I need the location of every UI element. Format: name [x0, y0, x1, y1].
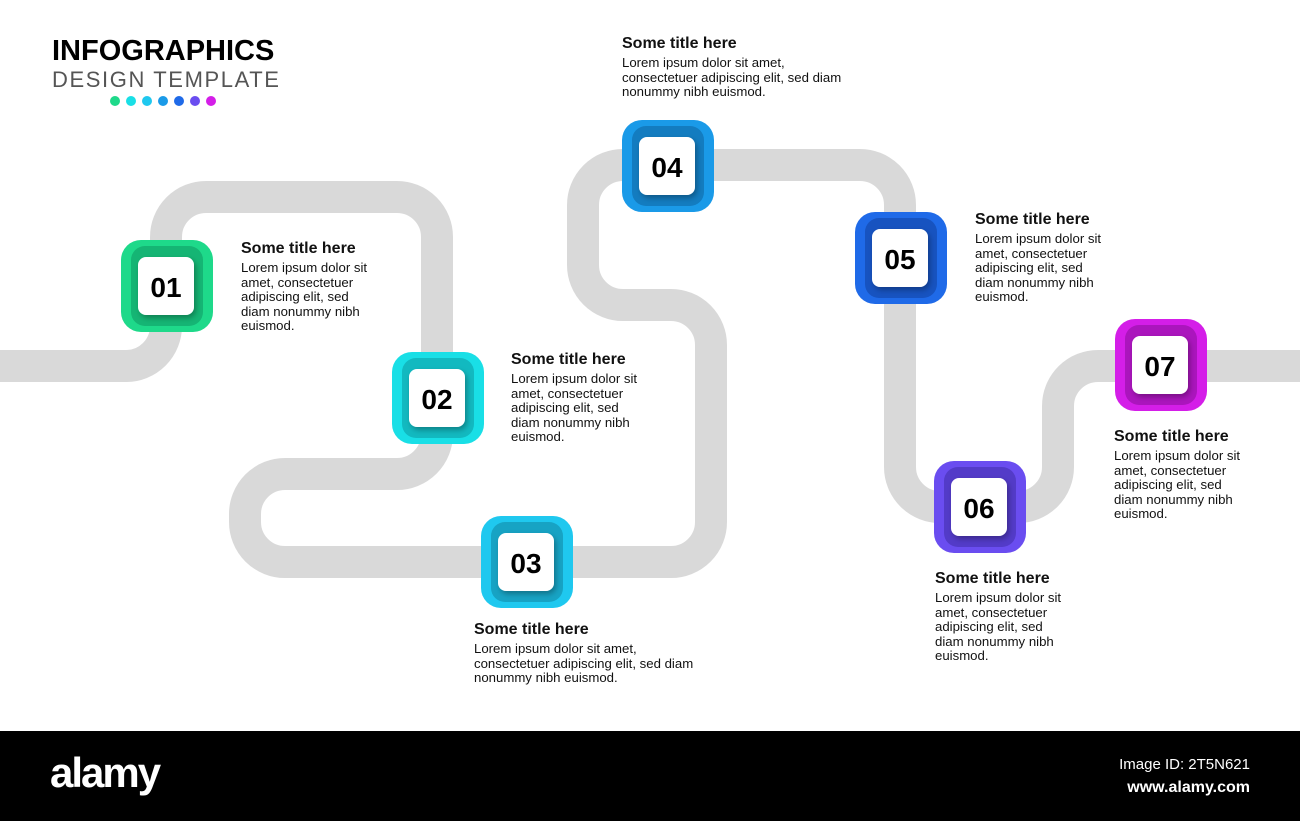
title: INFOGRAPHICS: [52, 35, 274, 67]
text 05: adipiscing elit, sed: [975, 260, 1083, 275]
title: DESIGN TEMPLATE: [52, 67, 281, 92]
text 07: diam nonummy nibh: [1114, 492, 1233, 507]
text 04: Some title here: [622, 35, 737, 52]
text 02: diam nonummy nibh: [511, 415, 630, 430]
text 07: adipiscing elit, sed: [1114, 477, 1222, 492]
text 01: diam nonummy nibh: [241, 304, 360, 319]
marker 06: 06: [963, 493, 995, 524]
marker 01: 01: [150, 272, 182, 303]
text 05: diam nonummy nibh: [975, 275, 1094, 290]
marker 04: 04: [651, 152, 683, 183]
text 04: Lorem ipsum dolor sit amet,: [622, 55, 785, 70]
text 06: Some title here: [935, 570, 1050, 587]
marker 03: [481, 516, 573, 608]
text 02: Lorem ipsum dolor sit: [511, 371, 637, 386]
text 05: amet, consectetuer: [975, 246, 1087, 261]
marker 05: 05: [884, 244, 916, 275]
text 03: nonummy nibh euismod.: [474, 670, 618, 685]
text 01: adipiscing elit, sed: [241, 289, 349, 304]
text 02: Some title here: [511, 351, 626, 368]
text 06: diam nonummy nibh: [935, 634, 1054, 649]
text 06: amet, consectetuer: [935, 605, 1047, 620]
text 07: amet, consectetuer: [1114, 463, 1226, 478]
text 05: euismod.: [975, 289, 1029, 304]
text 01: euismod.: [241, 318, 295, 333]
text 01: [241, 240, 367, 333]
text 03: Some title here: [474, 621, 589, 638]
marker 02: 02: [421, 384, 453, 415]
text 07: [1114, 428, 1240, 521]
text 06: [935, 570, 1061, 663]
image id: [1119, 756, 1250, 796]
marker 02: [392, 352, 484, 444]
marker 01: [121, 240, 213, 332]
logo: alamy: [50, 749, 159, 796]
text 03: [474, 621, 693, 685]
text 05: Some title here: [975, 211, 1090, 228]
text 02: [511, 351, 637, 444]
text 05: Lorem ipsum dolor sit: [975, 231, 1101, 246]
text 02: adipiscing elit, sed: [511, 400, 619, 415]
dots: [110, 96, 216, 106]
image id: Image ID: 2T5N621: [1119, 756, 1250, 773]
title: [52, 35, 281, 106]
text 06: euismod.: [935, 648, 989, 663]
marker 03: 03: [510, 548, 542, 579]
text 05: [975, 211, 1101, 304]
text 04: nonummy nibh euismod.: [622, 84, 766, 99]
text 03: consectetuer adipiscing elit, sed diam: [474, 656, 693, 671]
marker 07: 07: [1144, 351, 1176, 382]
text 06: adipiscing elit, sed: [935, 619, 1043, 634]
image id: www.alamy.com: [1127, 779, 1250, 796]
text 01: Some title here: [241, 240, 356, 257]
marker 07: [1115, 319, 1207, 411]
marker 06: [934, 461, 1026, 553]
marker 04: [622, 120, 714, 212]
road: [0, 165, 1300, 562]
text 02: amet, consectetuer: [511, 386, 623, 401]
text 01: Lorem ipsum dolor sit: [241, 260, 367, 275]
text 02: euismod.: [511, 429, 565, 444]
text 06: Lorem ipsum dolor sit: [935, 590, 1061, 605]
text 01: amet, consectetuer: [241, 275, 353, 290]
text 07: euismod.: [1114, 506, 1168, 521]
footer bar: [0, 731, 1300, 821]
marker 05: [855, 212, 947, 304]
text 07: Lorem ipsum dolor sit: [1114, 448, 1240, 463]
text 07: Some title here: [1114, 428, 1229, 445]
text 03: Lorem ipsum dolor sit amet,: [474, 641, 637, 656]
text 04: [622, 35, 841, 99]
text 04: consectetuer adipiscing elit, sed diam: [622, 70, 841, 85]
